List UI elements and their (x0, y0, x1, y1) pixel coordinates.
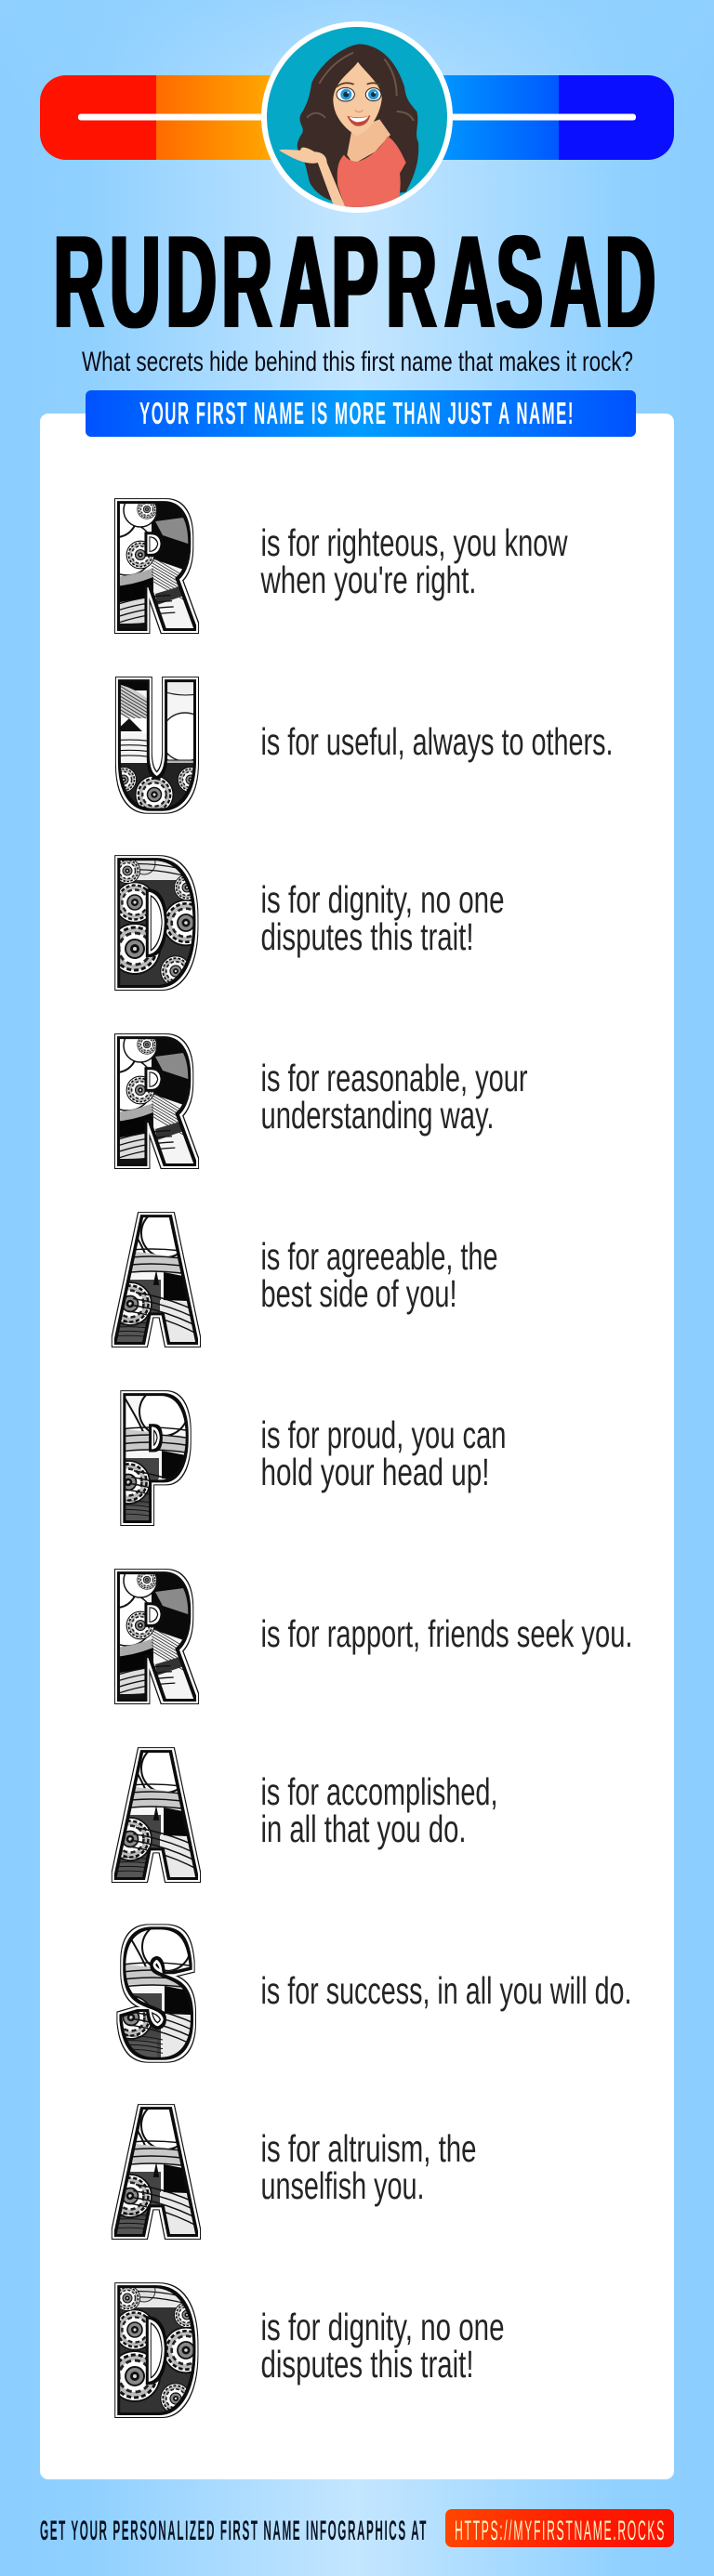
row 11 text (260, 2306, 504, 2385)
row 3 text: is for dignity, no one (260, 878, 504, 921)
row 7: letter R (113, 1569, 199, 1704)
arm and hand (279, 148, 346, 207)
footer url button (445, 2509, 674, 2547)
eyebrows (336, 83, 380, 87)
row 1 text: is for righteous, you know (260, 521, 568, 564)
row 10 text: is for altruism, the (260, 2127, 476, 2170)
row 10 text (260, 2127, 476, 2207)
title: RUDRAPRASAD (54, 209, 655, 356)
row 5 text: is for agreeable, the (260, 1235, 498, 1278)
row 6 text (260, 1413, 506, 1493)
row 11 text: disputes this trait! (260, 2343, 474, 2385)
hair highlights (307, 53, 414, 121)
banner (86, 390, 636, 437)
row 11 text: is for dignity, no one (260, 2306, 504, 2348)
row 3 text (260, 878, 504, 958)
row 9: letter S (116, 1924, 196, 2063)
row 6 text: is for proud, you can (260, 1413, 506, 1456)
row 8: letter A (112, 1747, 201, 1883)
row 4: letter R (113, 1033, 199, 1169)
row 3 text: disputes this trait! (260, 915, 474, 958)
row 8 text: is for accomplished, (260, 1770, 498, 1813)
row 8 text (260, 1770, 498, 1850)
row 6: letter P (120, 1390, 192, 1526)
row 1: letter R (113, 498, 199, 634)
row 6 text: hold your head up! (260, 1451, 489, 1493)
row 10 text: unselfish you. (260, 2164, 424, 2207)
row 2: letter U (115, 677, 199, 814)
mouth (347, 115, 370, 126)
row 4 text: is for reasonable, your (260, 1057, 528, 1099)
row 5 text (260, 1235, 498, 1315)
white content panel (40, 414, 674, 2479)
hair (298, 44, 418, 202)
avatar portrait (261, 21, 453, 213)
row 3: letter D (114, 855, 199, 991)
shirt (337, 137, 406, 211)
face (333, 62, 382, 136)
row 10: letter A (112, 2104, 201, 2240)
nose (355, 110, 364, 112)
neck (347, 119, 390, 164)
header color bar (40, 75, 674, 160)
eyes (337, 87, 354, 101)
row 8 text: in all that you do. (260, 1807, 467, 1850)
row 4 text (260, 1057, 528, 1137)
row 5: letter A (112, 1212, 201, 1347)
row 5 text: best side of you! (260, 1272, 457, 1315)
row 1 text: when you're right. (260, 559, 476, 601)
row 1 text (260, 521, 568, 601)
row 4 text: understanding way. (260, 1094, 495, 1137)
row 11: letter D (114, 2282, 199, 2418)
